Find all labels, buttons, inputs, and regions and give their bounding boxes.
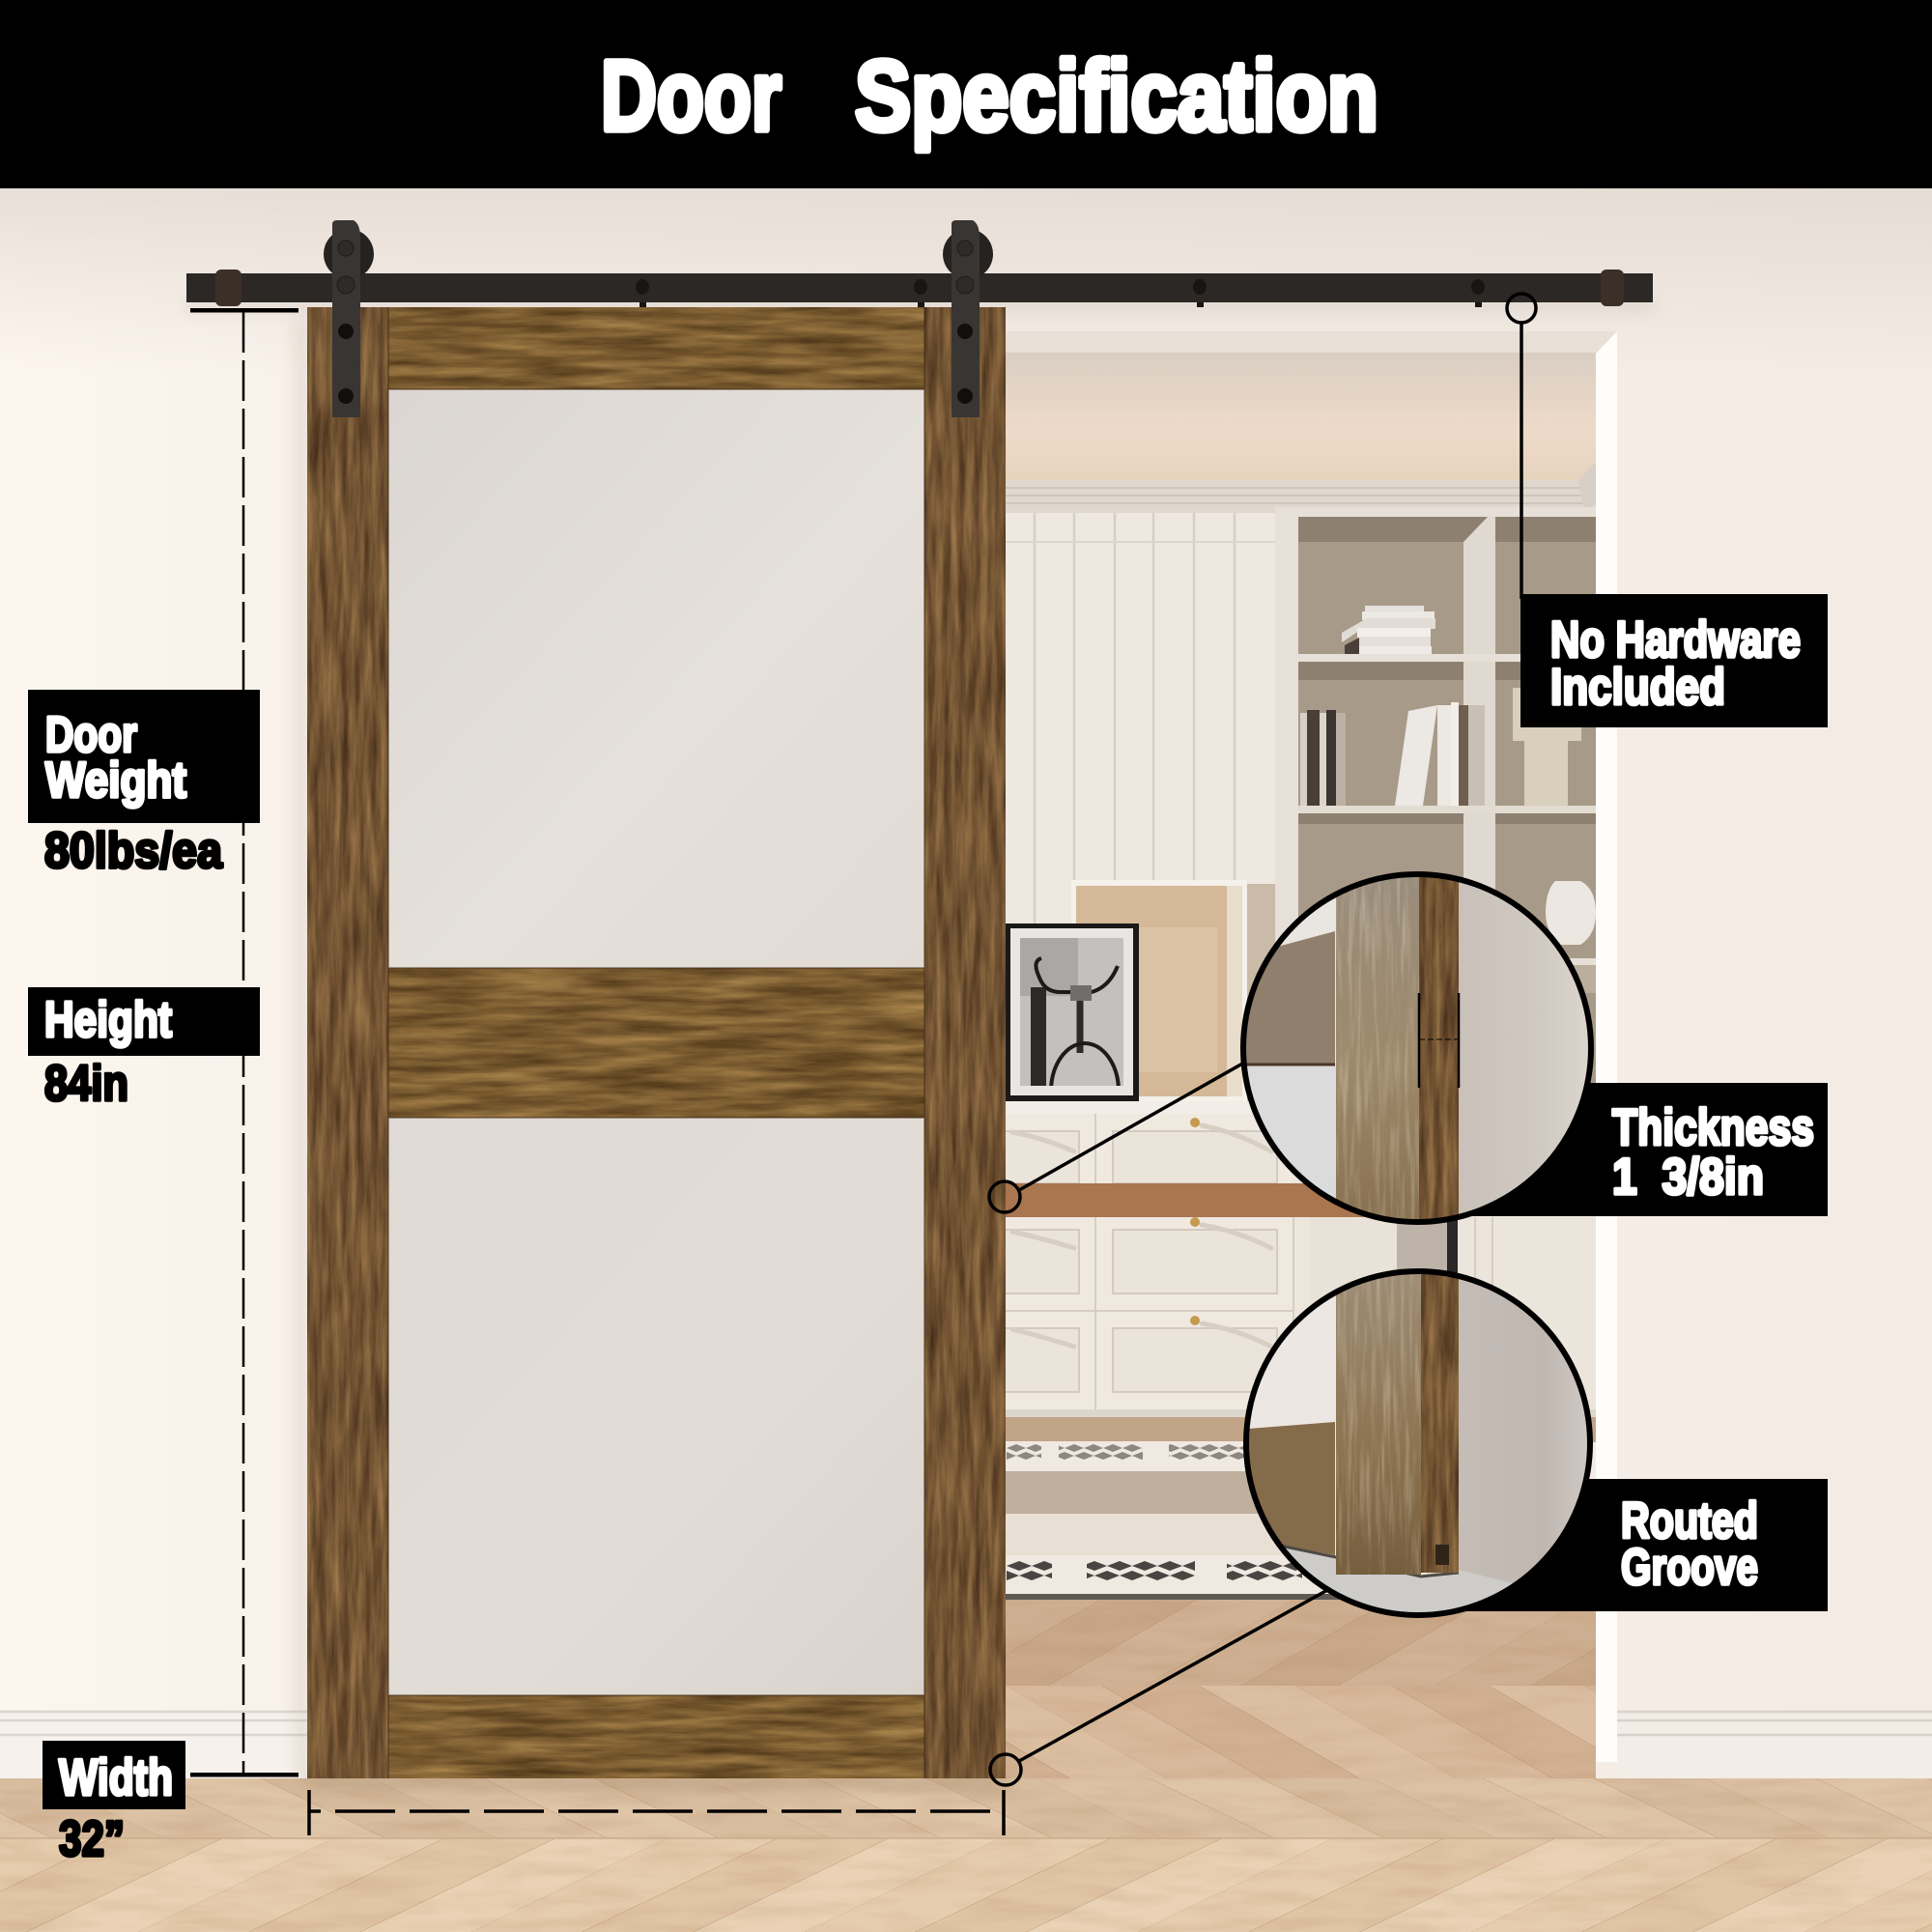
beadboard wall (1006, 513, 1276, 1102)
label: no hardware included (1520, 594, 1828, 727)
drawer recesses (995, 1131, 1277, 1392)
left hanger (324, 220, 374, 417)
rug (1006, 1441, 1392, 1600)
wooden shelf (1006, 1183, 1368, 1217)
label: no hardware included: No Hardware (1550, 611, 1801, 668)
label: thickness box: Thickness (1612, 1099, 1814, 1156)
uprights and shelves (1275, 507, 1298, 1125)
callout: hardware marker (1507, 294, 1536, 599)
thickness dimension marks (1419, 993, 1459, 1088)
value: height: 84in (44, 1056, 128, 1112)
baseboard right (1617, 1710, 1932, 1778)
callout: groove leader (990, 1589, 1329, 1785)
right hanger (943, 220, 993, 417)
callout: thickness leader (989, 1063, 1244, 1212)
zoom circle: routed groove (1236, 1265, 1599, 1633)
bottom rail (388, 1695, 924, 1778)
baseboard left (0, 1710, 307, 1778)
sliding track rail (186, 270, 1653, 307)
brass knobs (1190, 1118, 1200, 1325)
label: door weight: Weight (45, 753, 186, 809)
top rail (388, 307, 924, 389)
door shadow on wall (295, 319, 310, 1777)
main herringbone floor (0, 1778, 1932, 1932)
label: height: Height (44, 992, 172, 1048)
label: thickness box (1449, 1083, 1828, 1216)
rail shadow on wall (186, 301, 1653, 309)
lower rug diamonds (1007, 1561, 1302, 1580)
upper panel (388, 389, 924, 969)
bookshelf (1275, 507, 1596, 1135)
books on shelf: upright (1300, 702, 1485, 806)
title: Door (601, 41, 781, 151)
ceiling (1006, 353, 1596, 483)
lamp on shelf (1513, 688, 1581, 806)
label: door weight: Door (45, 707, 137, 763)
right door jamb (1596, 331, 1617, 1762)
title: Specification (855, 41, 1378, 151)
vase (1546, 881, 1596, 945)
upper rug diamonds (1007, 1444, 1244, 1460)
label: routed groove box: Routed (1621, 1492, 1758, 1549)
lower panel (388, 1118, 924, 1697)
middle rail (388, 968, 924, 1118)
label: routed groove box (1449, 1479, 1828, 1611)
back panels (1298, 517, 1596, 1135)
label: thickness box: 1 3/8in (1612, 1149, 1764, 1206)
art: beige canvas (1071, 880, 1247, 1102)
label: height (28, 987, 260, 1056)
label: width: Width (59, 1749, 173, 1806)
width dimension line (309, 1790, 1004, 1835)
title banner (0, 0, 1932, 188)
zoom circle: door thickness (1236, 869, 1594, 1236)
floor shadow under door (307, 1778, 1006, 1786)
label: door weight (28, 690, 260, 823)
art: framed bicycle photo (1006, 923, 1139, 1101)
books on shelf: stack (1342, 606, 1435, 654)
wall top shading (0, 188, 1932, 372)
knob shadows (1012, 1125, 1271, 1347)
label: routed groove box: Groove (1621, 1539, 1758, 1596)
room floor (1006, 1584, 1596, 1778)
under-shelf shadows (1298, 517, 1596, 824)
barn door (307, 307, 1006, 1778)
room seen through the opening (995, 306, 1617, 1778)
label: no hardware included: Included (1550, 659, 1725, 716)
rail bolts (636, 279, 1485, 307)
crown molding (1006, 462, 1596, 513)
height dimension line (190, 308, 298, 1777)
left stile (307, 307, 388, 1778)
right stile (924, 307, 1006, 1778)
cabinets (995, 1101, 1596, 1417)
value: door weight: 80lbs/ea (44, 823, 223, 879)
value: width: 32” (59, 1811, 125, 1867)
soffit (1006, 306, 1617, 354)
back floor strip (1006, 1417, 1596, 1442)
label: width (43, 1741, 185, 1809)
